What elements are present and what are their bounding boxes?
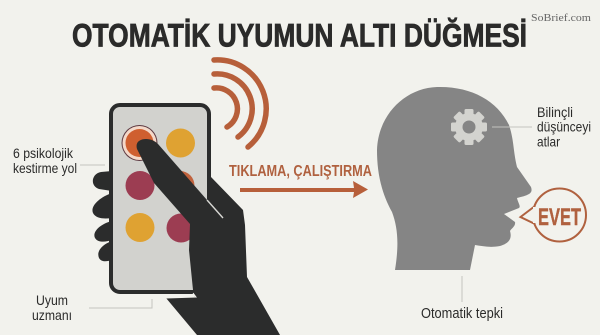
label: Bilinçli düşünceyi atlar: düşünceyi xyxy=(537,118,591,134)
icon: signal waves xyxy=(214,60,266,147)
button: gold lower xyxy=(126,213,154,242)
label: 6 psikolojik kestirme yol: 6 psikolojik xyxy=(13,145,74,161)
icon: hand pointing xyxy=(137,139,280,335)
label: Otomatik tepki xyxy=(421,276,503,322)
label: Bilinçli düşünceyi atlar: Bilinçli xyxy=(537,104,573,120)
label: Bilinçli düşünceyi atlar: atlar xyxy=(537,134,560,150)
watermark: SoBrief.com xyxy=(531,13,591,24)
label: Uyum uzmanı: uzmanı xyxy=(32,307,72,323)
phone xyxy=(111,105,209,292)
icon: gear xyxy=(451,109,487,145)
label: 6 psikolojik kestirme yol xyxy=(13,145,105,176)
arrow label: TIKLAMA, ÇALIŞTIRMA: TIKLAMA, ÇALIŞTIRMA xyxy=(229,163,372,180)
button: orange middle xyxy=(166,171,194,200)
label: Uyum uzmanı xyxy=(32,292,152,323)
label: Otomatik tepki: Otomatik tepki xyxy=(421,306,503,322)
label: 6 psikolojik kestirme yol: kestirme yol xyxy=(13,160,77,176)
speech bubble: EVET: EVET xyxy=(538,204,581,231)
hand highlight xyxy=(166,293,196,298)
button: active orange xyxy=(122,125,158,161)
button: gold top xyxy=(166,128,195,158)
label: Uyum uzmanı: Uyum xyxy=(36,292,68,308)
button: maroon middle xyxy=(126,171,154,200)
button: maroon lower xyxy=(166,214,196,242)
label: Bilinçli düşünceyi atlar xyxy=(492,104,591,150)
arrow xyxy=(240,181,368,198)
icon: hand back fingers xyxy=(92,171,112,261)
head silhouette xyxy=(377,87,532,270)
speech bubble: EVET xyxy=(520,188,586,242)
